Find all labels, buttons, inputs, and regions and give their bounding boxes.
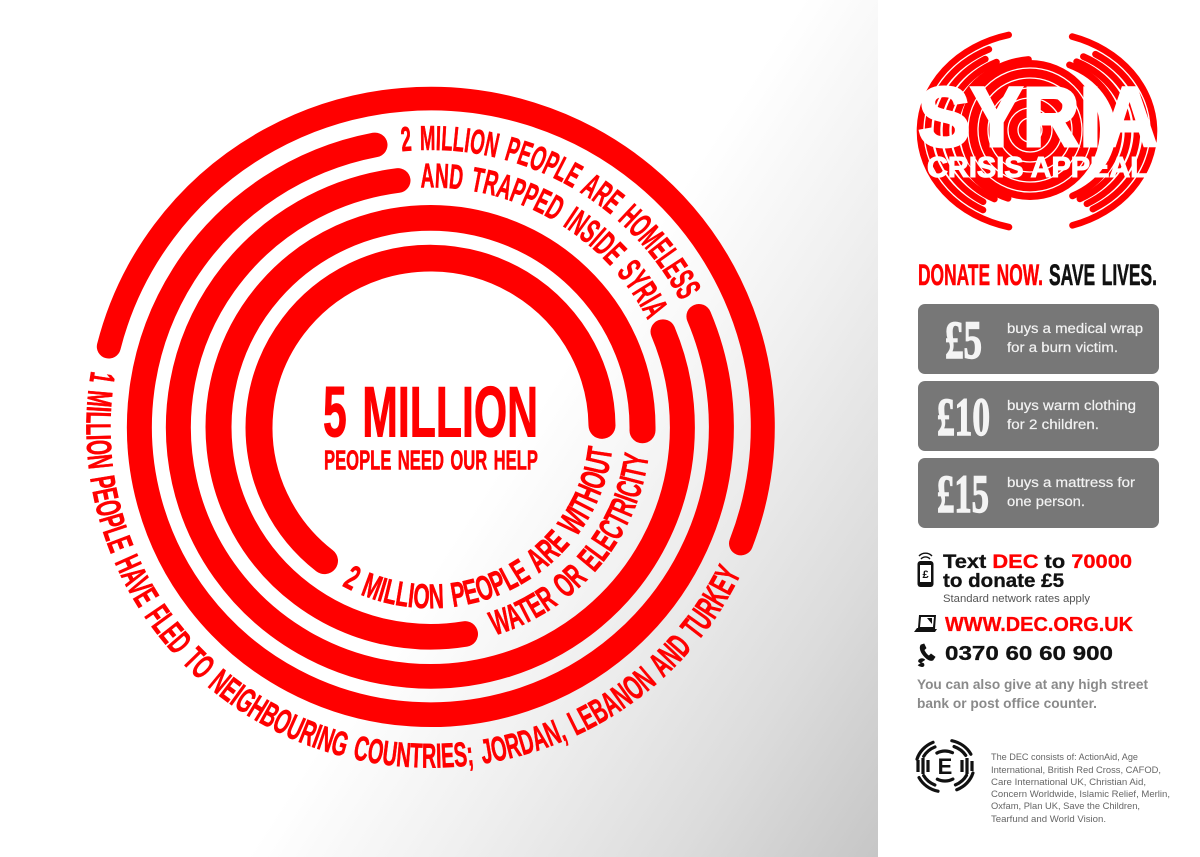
text donate line: Text DEC to 70000 — [943, 552, 1132, 573]
DEC members text: The DEC consists of: ActionAid, Age — [991, 752, 1138, 762]
logo: Syria Crisis Appeal — [918, 32, 1158, 230]
website: WWW.DEC.ORG.UK — [945, 614, 1134, 636]
panel: £5: £5 — [945, 310, 982, 370]
panel: £5 — [918, 304, 1159, 374]
DEC members text: International, British Red Cross, CAFOD, — [991, 765, 1161, 775]
icon: mobile phone: £ — [922, 569, 929, 581]
heading: donate now save lives: DONATE NOW. — [918, 259, 1043, 292]
icon: telephone handset — [918, 644, 935, 667]
DEC members text: Tearfund and World Vision. — [991, 814, 1106, 824]
curved label: refugees: 1 MILLION PEOPLE HAVE FLED TO NEIGHBOURING COUNTRIES; JORDAN, LEBANON AND TURKEY — [86, 372, 740, 771]
panel: £10: buys warm clothing — [1007, 398, 1136, 413]
panel: £10: for 2 children. — [1007, 417, 1099, 432]
icon: mobile phone — [918, 553, 934, 587]
panel: £10 — [918, 381, 1159, 451]
text donate line: Standard network rates apply — [943, 593, 1091, 605]
curved label: homeless line 1: 2 MILLION PEOPLE ARE HOMELESS — [401, 126, 700, 299]
panel: £15: £15 — [937, 464, 989, 524]
ring: third — [178, 180, 682, 676]
ring: outermost — [109, 99, 763, 543]
other ways to give: You can also give at any high street — [917, 676, 1148, 692]
other ways to give — [917, 676, 1148, 711]
DEC members text: Concern Worldwide, Islamic Relief, Merlin, — [991, 789, 1170, 799]
panel: £10: £10 — [937, 387, 990, 447]
ring: second — [219, 218, 643, 637]
centre headline — [323, 374, 538, 476]
DEC members text: Care International UK, Christian Aid, — [991, 777, 1146, 787]
logo: Syria Crisis Appeal: CRISIS APPEAL — [927, 152, 1148, 184]
ring: innermost — [259, 258, 602, 561]
logo: DEC — [916, 740, 974, 792]
panel: £15 — [918, 458, 1159, 528]
centre headline: PEOPLE NEED OUR HELP — [324, 444, 538, 476]
centre headline: 5 MILLION — [323, 374, 538, 452]
logo: Syria Crisis Appeal: SYRIA — [918, 70, 1158, 164]
DEC members text: Oxfam, Plan UK, Save the Children, — [991, 801, 1140, 811]
other ways to give: bank or post office counter. — [917, 695, 1097, 711]
curved label: without water line 1: 2 MILLION PEOPLE ARE WITHOUT — [342, 445, 612, 609]
text donate line: to donate £5 — [943, 571, 1064, 592]
concentric ring chart — [86, 86, 775, 771]
ring: fourth — [139, 145, 721, 715]
panel: £15: one person. — [1007, 494, 1085, 509]
panel: £5: for a burn victim. — [1007, 340, 1118, 355]
DEC members text — [991, 752, 1170, 824]
panel: £5: buys a medical wrap — [1007, 321, 1143, 336]
icon: laptop — [914, 615, 937, 632]
grey gradient background panel — [0, 0, 878, 857]
curved label: homeless line 2: AND TRAPPED INSIDE SYRIA — [420, 163, 667, 320]
phone number: 0370 60 60 900 — [945, 643, 1113, 665]
text donate line — [943, 552, 1132, 605]
panel: £15: buys a mattress for — [1007, 475, 1136, 490]
curved label: without water line 2: WATER OR ELECTRICITY — [486, 452, 648, 635]
logo: DEC: E — [938, 754, 952, 779]
